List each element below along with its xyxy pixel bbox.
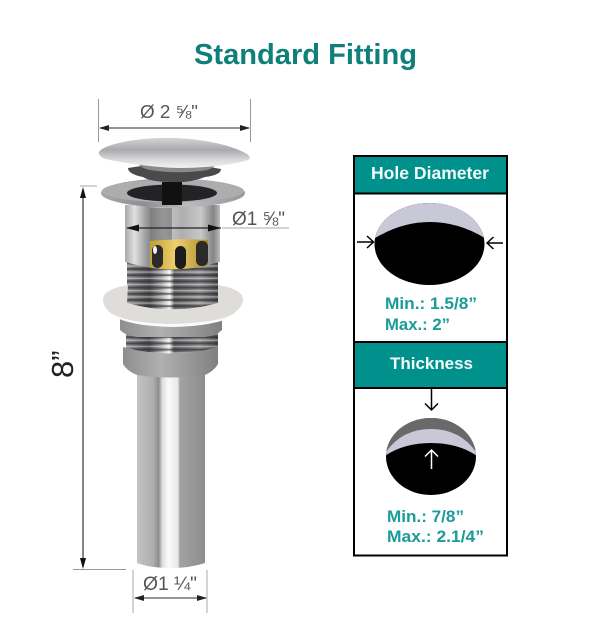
gold slotted insert	[150, 239, 208, 269]
body cylinder	[125, 205, 220, 269]
dimension: top diameter	[98, 99, 250, 142]
dark reflection on body	[150, 208, 172, 241]
lower threads	[126, 331, 218, 355]
dimension: top diameter: Ø 2 ⅝"	[140, 102, 198, 122]
panel frame	[354, 156, 507, 556]
dimension: tailpiece diameter	[133, 570, 207, 613]
nut	[120, 318, 222, 337]
header: hole diameter: Hole Diameter	[371, 163, 489, 183]
dimension: tailpiece diameter: Ø1 ¼"	[143, 574, 197, 595]
text: hole diameter limits: Max.: 2”	[385, 315, 450, 334]
dimension: total height	[45, 186, 126, 570]
text: hole diameter limits: Min.: 1.5/8”	[385, 294, 477, 313]
dimension: total height: 8”	[45, 350, 80, 378]
text: hole diameter limits	[385, 294, 477, 334]
text: thickness limits: Min.: 7/8”	[387, 507, 464, 526]
panel: fitting requirements	[354, 156, 507, 556]
product: pop-up drain	[99, 138, 250, 568]
text: thickness limits: Max.: 2.1/4”	[387, 527, 484, 546]
title: Standard Fitting	[194, 39, 417, 71]
lower lock ring	[123, 347, 218, 378]
header: hole diameter	[354, 157, 507, 194]
body upper threads	[127, 262, 218, 310]
flange	[101, 178, 245, 208]
top cap	[99, 138, 250, 168]
dimension: flange inner diameter	[126, 209, 289, 232]
dimension: flange inner diameter: Ø1 ⅝"	[232, 209, 285, 230]
header: thickness: Thickness	[390, 354, 473, 373]
tailpiece tube	[137, 372, 205, 568]
white gasket	[103, 285, 243, 327]
diagram: thickness	[386, 389, 476, 495]
diagram: hole diameter	[357, 203, 503, 285]
infographic canvas	[52, 43, 508, 613]
text: thickness limits	[387, 507, 484, 546]
stem collar	[128, 162, 221, 182]
header: thickness	[354, 342, 507, 388]
